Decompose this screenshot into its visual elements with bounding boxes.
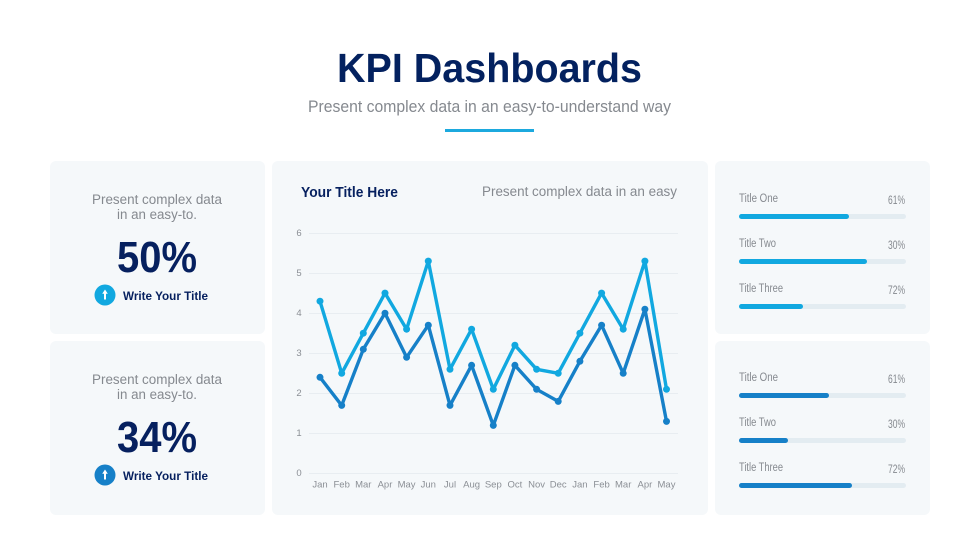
x axis labels: Feb bbox=[593, 480, 610, 490]
x axis labels: May bbox=[658, 480, 676, 490]
progress: Title Three bbox=[739, 283, 906, 309]
progress: Title One: 61% bbox=[888, 193, 905, 207]
progress: Title Two: Title Two bbox=[739, 238, 776, 250]
x axis labels: Mar bbox=[615, 480, 631, 490]
KPI description: Present complex data bbox=[92, 192, 222, 207]
KPI description: in an easy-to. bbox=[117, 207, 197, 222]
progress: Title Two bbox=[739, 417, 906, 443]
x axis labels: Jun bbox=[421, 480, 436, 490]
x axis labels: Oct bbox=[508, 480, 523, 490]
progress: Title One: Title One bbox=[739, 193, 778, 205]
progress: Title Three: Title Three bbox=[739, 462, 783, 474]
y axis labels: 6 bbox=[296, 228, 302, 239]
x axis labels bbox=[312, 480, 676, 490]
KPI value 50%: 50% bbox=[117, 233, 197, 282]
x axis labels: Jul bbox=[444, 480, 456, 490]
title: KPI Dashboards bbox=[337, 45, 642, 91]
KPI caption: Write Your Title bbox=[123, 469, 208, 483]
chart title: Your Title Here bbox=[301, 185, 398, 201]
progress: Title One bbox=[739, 372, 906, 398]
chart description: Present complex data in an easy bbox=[482, 184, 677, 199]
y axis labels bbox=[296, 228, 302, 479]
icon: up arrow bbox=[94, 284, 116, 306]
line series: light blue bbox=[316, 258, 670, 393]
progress: Title Two bbox=[739, 238, 906, 264]
KPI description: in an easy-to. bbox=[117, 387, 197, 402]
y axis labels: 5 bbox=[296, 268, 302, 279]
x axis labels: Mar bbox=[355, 480, 371, 490]
x axis labels: Apr bbox=[378, 480, 392, 490]
KPI description: Present complex data bbox=[92, 372, 222, 387]
y axis labels: 3 bbox=[296, 348, 302, 359]
x axis labels: Aug bbox=[463, 480, 480, 490]
x axis labels: Apr bbox=[638, 480, 652, 490]
KPI value 34%: 34% bbox=[117, 413, 197, 462]
x axis labels: May bbox=[398, 480, 416, 490]
line series: dark blue bbox=[316, 306, 670, 429]
KPI caption: Write Your Title bbox=[123, 289, 208, 303]
panel: top-left KPI 50% bbox=[50, 161, 265, 334]
title accent bar bbox=[445, 129, 534, 132]
x axis labels: Feb bbox=[334, 480, 350, 490]
progress: Title Two: 30% bbox=[888, 238, 905, 252]
progress: Title Three bbox=[739, 462, 906, 488]
progress: Title Two: 30% bbox=[888, 417, 905, 431]
progress: Title One: Title One bbox=[739, 372, 778, 384]
icon: up arrow bbox=[94, 464, 116, 486]
progress: Title Three: 72% bbox=[888, 462, 905, 476]
y axis labels: 0 bbox=[296, 468, 302, 479]
panel: line chart bbox=[272, 161, 708, 515]
y axis labels: 4 bbox=[296, 308, 302, 319]
x axis labels: Nov bbox=[528, 480, 545, 490]
y axis labels: 1 bbox=[296, 428, 302, 439]
panel: top-right progress bars bbox=[715, 161, 930, 334]
progress: Title Three: Title Three bbox=[739, 283, 783, 295]
panel: bottom-left KPI 34% bbox=[50, 341, 265, 515]
progress: Title One: 61% bbox=[888, 372, 905, 386]
subtitle: Present complex data in an easy-to-understand way bbox=[308, 98, 672, 116]
progress: Title Two: Title Two bbox=[739, 417, 776, 429]
x axis labels: Sep bbox=[485, 480, 502, 490]
x axis labels: Jan bbox=[572, 480, 588, 490]
x axis labels: Dec bbox=[550, 480, 567, 490]
progress: Title Three: 72% bbox=[888, 283, 905, 297]
y axis labels: 2 bbox=[296, 388, 302, 399]
x axis labels: Jan bbox=[312, 480, 328, 490]
panel: bottom-right progress bars bbox=[715, 341, 930, 515]
KPI description bbox=[92, 372, 222, 402]
progress: Title One bbox=[739, 193, 906, 219]
KPI description bbox=[92, 192, 222, 222]
